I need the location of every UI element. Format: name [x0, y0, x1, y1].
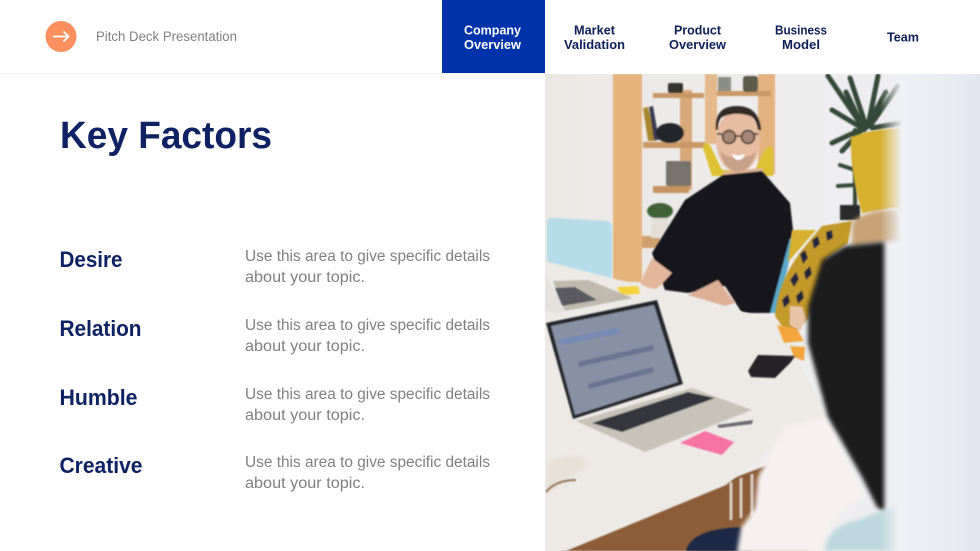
- factor: Creative: Use this area to give specific details: [245, 454, 490, 471]
- factor: Creative: Creative: [60, 453, 142, 478]
- header divider: [0, 73, 545, 74]
- man in black sweater: [640, 106, 793, 313]
- main laptop: [546, 300, 753, 452]
- photo: team meeting around a table: [545, 74, 980, 551]
- factor: Relation: [60, 316, 490, 355]
- factor: Humble: Use this area to give specific details: [245, 386, 490, 403]
- blurred foreground shoulder: [880, 74, 980, 551]
- nav item: Business Model: Business: [775, 24, 827, 38]
- nav item: Business Model: [775, 24, 827, 52]
- factor: Humble: about your topic.: [245, 407, 365, 424]
- plant: [828, 76, 902, 206]
- factor: Desire: Use this area to give specific details: [245, 248, 490, 265]
- dark lower figure: [686, 527, 751, 551]
- nav item: Market Validation: Market: [574, 24, 616, 38]
- factor: Creative: about your topic.: [245, 475, 365, 492]
- factor list: [60, 247, 490, 492]
- nav item: Product Overview: [669, 24, 726, 52]
- factor: Humble: [60, 385, 490, 424]
- foreground white shirt: [737, 417, 865, 551]
- blonde hair: [852, 210, 902, 246]
- factor: Desire: Desire: [60, 247, 122, 272]
- foreground light blue chair: [825, 506, 895, 551]
- title: Key Factors: [60, 115, 272, 157]
- deck name: Pitch Deck Presentation: [96, 29, 237, 44]
- table legs: [731, 474, 752, 520]
- nav item: Product Overview: Overview: [669, 38, 726, 52]
- nav item: Team: Team: [887, 30, 919, 44]
- floor: [560, 465, 808, 551]
- foreground long dark hair: [808, 242, 885, 512]
- factor: Relation: about your topic.: [245, 338, 365, 355]
- nav item: Business Model: Model: [782, 38, 820, 52]
- phone: [748, 355, 795, 378]
- nav item: Product Overview: Product: [674, 24, 722, 38]
- bookshelf: [613, 74, 775, 282]
- small back laptop: [546, 278, 632, 313]
- nav item: Market Validation: Validation: [564, 38, 625, 52]
- table: [545, 261, 828, 551]
- yellow chair behind man: [703, 143, 773, 176]
- icon: orange arrow circle: [46, 21, 76, 52]
- notebook: [546, 456, 588, 492]
- dark pot by chair: [840, 205, 860, 220]
- nav item: Company Overview (active): [442, 0, 545, 73]
- yellow checked shirt person: [775, 221, 852, 339]
- factor: Humble: Humble: [60, 385, 138, 410]
- navigation bar: [442, 0, 919, 73]
- nav item: Company Overview (active): Overview: [464, 38, 521, 52]
- factor: Desire: about your topic.: [245, 269, 365, 286]
- large yellow chair: [850, 128, 901, 214]
- factor: Creative: [60, 453, 490, 492]
- nav item: Company Overview (active): Company: [464, 24, 521, 38]
- sticky notes: [617, 286, 805, 455]
- factor: Desire: [60, 247, 490, 286]
- light blue chair: [547, 218, 612, 279]
- factor: Relation: Use this area to give specific details: [245, 317, 490, 334]
- nav item: Market Validation: [564, 24, 625, 52]
- factor: Relation: Relation: [60, 316, 142, 341]
